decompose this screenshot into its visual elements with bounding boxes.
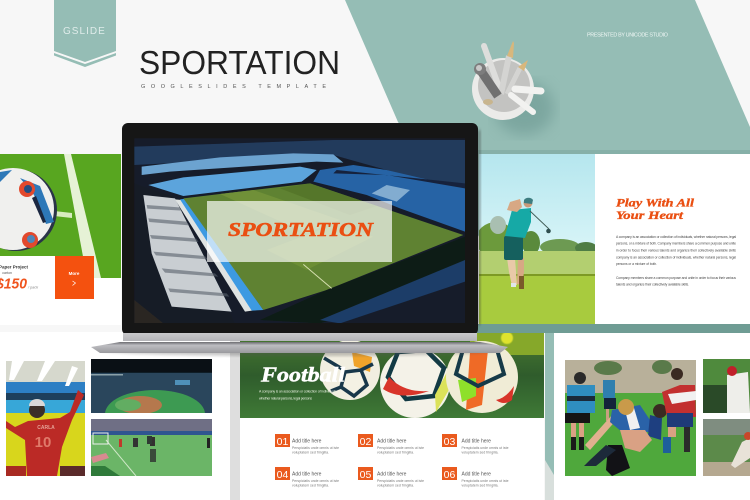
feature item 05: Perspiciatis unde omnis ut iste [377, 479, 424, 483]
feature item 01 [275, 434, 339, 454]
laptop lid [122, 123, 478, 335]
feature item 05 [358, 467, 424, 487]
feature item 04: 04 [277, 469, 288, 481]
slide: sports collage right [545, 333, 750, 500]
teal backdrop shape [345, 0, 750, 500]
golfer body text: A company is an association or collection of individuals, whether natural persons, legal [616, 235, 736, 239]
gslide ribbon badge: GSLIDE [63, 26, 106, 37]
feature item 06 [442, 467, 509, 487]
slide: golfer [475, 150, 750, 333]
gslide ribbon badge [54, 0, 116, 67]
slide: photo collage left [0, 332, 240, 500]
golfer heading: Play With All [616, 196, 695, 210]
feature item 06: Add title here [462, 472, 491, 478]
golfer heading: Your Heart [616, 208, 684, 222]
ball left [320, 340, 380, 400]
feature item 05: voluptatem sed fringilla. [377, 483, 414, 487]
photo: fan in red shirt [6, 361, 85, 476]
golfer body text: company is an association or collection of individuals, whether natural persons, legal [616, 255, 736, 259]
more button: More [69, 271, 80, 276]
presented by label: PRESENTED BY UNICODE STUDIO [587, 32, 668, 38]
feature item 03: 03 [444, 436, 455, 448]
golfer body text [616, 235, 736, 286]
feature item 03 [442, 434, 509, 454]
golfer body text: persons or a mixture of both. [616, 262, 657, 266]
feature item 02: Add title here [377, 438, 407, 444]
photo: fan in red shirt: 10 [35, 434, 51, 451]
laptop base [91, 342, 508, 353]
photo: baseball player [703, 419, 750, 476]
translucent title panel [207, 201, 392, 262]
feature item 04: Add title here [292, 472, 322, 478]
product card [0, 256, 55, 297]
feature item 06: Perspiciatis unde omnis ut iste [462, 479, 509, 483]
feature item 02: 02 [360, 436, 371, 448]
ball right [446, 341, 518, 413]
feature item 06: voluptatem sed fringilla. [462, 483, 499, 487]
product card: / pack [27, 286, 39, 290]
feature item 06: 06 [444, 469, 455, 481]
feature item 02 [358, 434, 424, 454]
photo: cricket player [703, 359, 750, 413]
ball centre [380, 348, 450, 418]
feature item 02: voluptatem sed fringilla. [377, 450, 414, 454]
feature item 03: voluptatem sed fringilla. [462, 450, 499, 454]
icon: pencil cup [472, 41, 554, 135]
laptop [91, 123, 508, 356]
photo: soccer match [91, 419, 212, 476]
photo: rugby tackle [565, 360, 696, 476]
feature item 04 [275, 467, 339, 487]
laptop screen title: SPORTATION [228, 219, 375, 241]
product card: carton [2, 271, 12, 275]
golfer body text: Company members share a common purpose and unite in order to focus their various [616, 276, 736, 280]
feature item 04: Perspiciatis unde omnis ut iste [292, 479, 339, 483]
feature item 01: Add title here [292, 438, 322, 444]
feature item 05: Add title here [377, 472, 407, 478]
feature item 01: Perspiciatis unde omnis ut iste [292, 446, 339, 450]
football caption: A company is an association or collection of individuals, [259, 390, 337, 394]
photo: fan in red shirt: CARLA [37, 425, 55, 431]
feature item 02: Perspiciatis unde omnis ut iste [377, 446, 424, 450]
feature item 05: 05 [360, 469, 371, 481]
golfer body text: talents and organize their collectively available skills. [616, 282, 689, 286]
slide: soccer ball and product card [0, 154, 121, 278]
football caption [259, 390, 337, 400]
title: SPORTATION [139, 45, 340, 82]
photo: baseball stadium [91, 359, 212, 413]
subtitle: GOOGLESLIDES TEMPLATE [141, 84, 326, 90]
feature item 04: voluptatem sed fringilla. [292, 483, 329, 487]
football caption: whether natural persons, legal persons [259, 396, 312, 400]
feature item 03: Perspiciatis unde omnis ut iste [462, 446, 509, 450]
golfer photo [476, 154, 597, 324]
feature item 03: Add title here [462, 438, 491, 444]
football photo [240, 332, 544, 418]
golfer heading [616, 196, 695, 222]
feature item 01: voluptatem sed fringilla. [292, 450, 329, 454]
golfer body text: in order to focus their various talents and organize their collectively available skills [616, 248, 736, 252]
slide: football [240, 332, 544, 500]
stadium photo [134, 138, 465, 323]
golfer body text: persons, or a mixture of both. Company members share a common purpose and unite [616, 242, 736, 246]
football heading: Football [260, 363, 345, 387]
feature item 01: 01 [277, 436, 288, 448]
more button [55, 256, 94, 299]
